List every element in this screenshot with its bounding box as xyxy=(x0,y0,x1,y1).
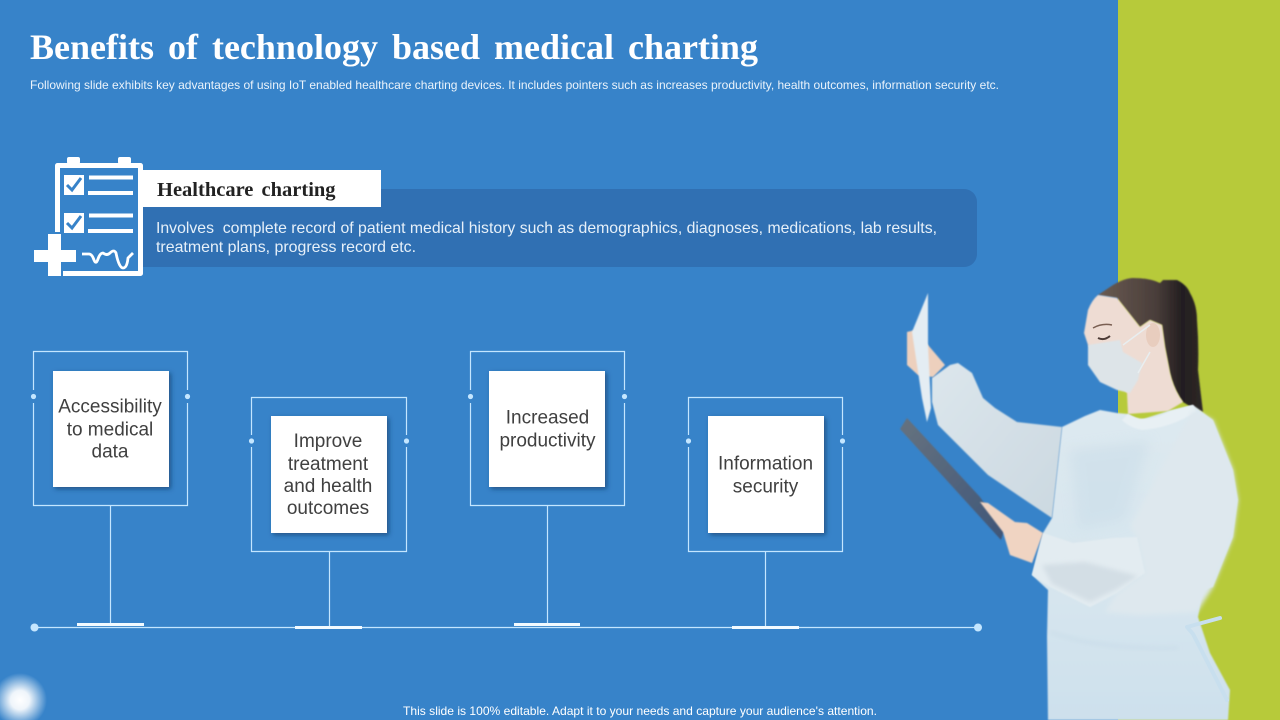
x-ray sheet xyxy=(912,293,931,422)
card: treatment outcomes: and health xyxy=(284,476,372,497)
card: productivity: Increased xyxy=(506,408,589,428)
footer note: This slide is 100% editable. Adapt it to your needs and capture your audience's attention. xyxy=(403,704,877,718)
right cuff xyxy=(1032,533,1145,607)
gown body xyxy=(1032,405,1238,720)
figure: medical worker in gown xyxy=(900,278,1238,720)
decorative glow xyxy=(0,673,47,720)
card: treatment outcomes: treatment xyxy=(288,454,369,475)
card: accessibility: Accessibility xyxy=(58,396,162,418)
description xyxy=(156,220,937,256)
card: productivity xyxy=(468,352,627,626)
heading: Healthcare charting xyxy=(157,179,336,201)
lower hand xyxy=(980,502,1043,563)
hair and ponytail xyxy=(1098,278,1203,412)
clipboard xyxy=(900,418,1004,540)
waist seam xyxy=(1050,632,1178,648)
title: Benefits of technology based medical charting xyxy=(30,27,758,67)
panel: healthcare charting xyxy=(34,157,977,276)
timeline baseline xyxy=(30,624,982,632)
gown ties xyxy=(1187,618,1227,700)
card: information security: Information xyxy=(718,454,813,474)
eyebrow xyxy=(1093,324,1112,328)
icon: clipboard with medical cross xyxy=(34,157,140,276)
subtitle: Following slide exhibits key advantages of using IoT enabled healthcare charting devices. It includes pointers such as increases productivity, health outcomes, information security etc. xyxy=(30,78,999,92)
card: accessibility: data xyxy=(92,442,129,462)
right upper sleeve xyxy=(1105,410,1238,615)
face mask xyxy=(1088,340,1142,393)
torso shade xyxy=(1070,440,1150,530)
description: Involves complete record of patient medical history such as demographics, diagnoses, medications, lab results, xyxy=(156,220,937,237)
left arm sleeve xyxy=(932,363,1062,518)
background: green side band xyxy=(1118,0,1280,720)
card: productivity: productivity xyxy=(499,430,596,452)
heading tab xyxy=(142,170,381,207)
ear xyxy=(1146,323,1160,347)
card: treatment outcomes xyxy=(249,398,409,629)
face and neck skin xyxy=(1084,295,1183,414)
card: information security xyxy=(686,398,845,629)
card: treatment outcomes: Improve xyxy=(294,431,362,452)
card: accessibility xyxy=(31,352,190,626)
panel background xyxy=(120,189,977,267)
card: information security: security xyxy=(733,476,799,498)
description: treatment plans, progress record etc. xyxy=(156,239,416,256)
mask straps xyxy=(1123,325,1150,373)
card: treatment outcomes: outcomes xyxy=(287,498,369,519)
gown collar xyxy=(1122,405,1196,430)
upper hand xyxy=(907,330,945,377)
card: accessibility: to medical xyxy=(67,420,153,440)
eye xyxy=(1098,336,1110,339)
cuff underside shade xyxy=(1042,562,1138,602)
